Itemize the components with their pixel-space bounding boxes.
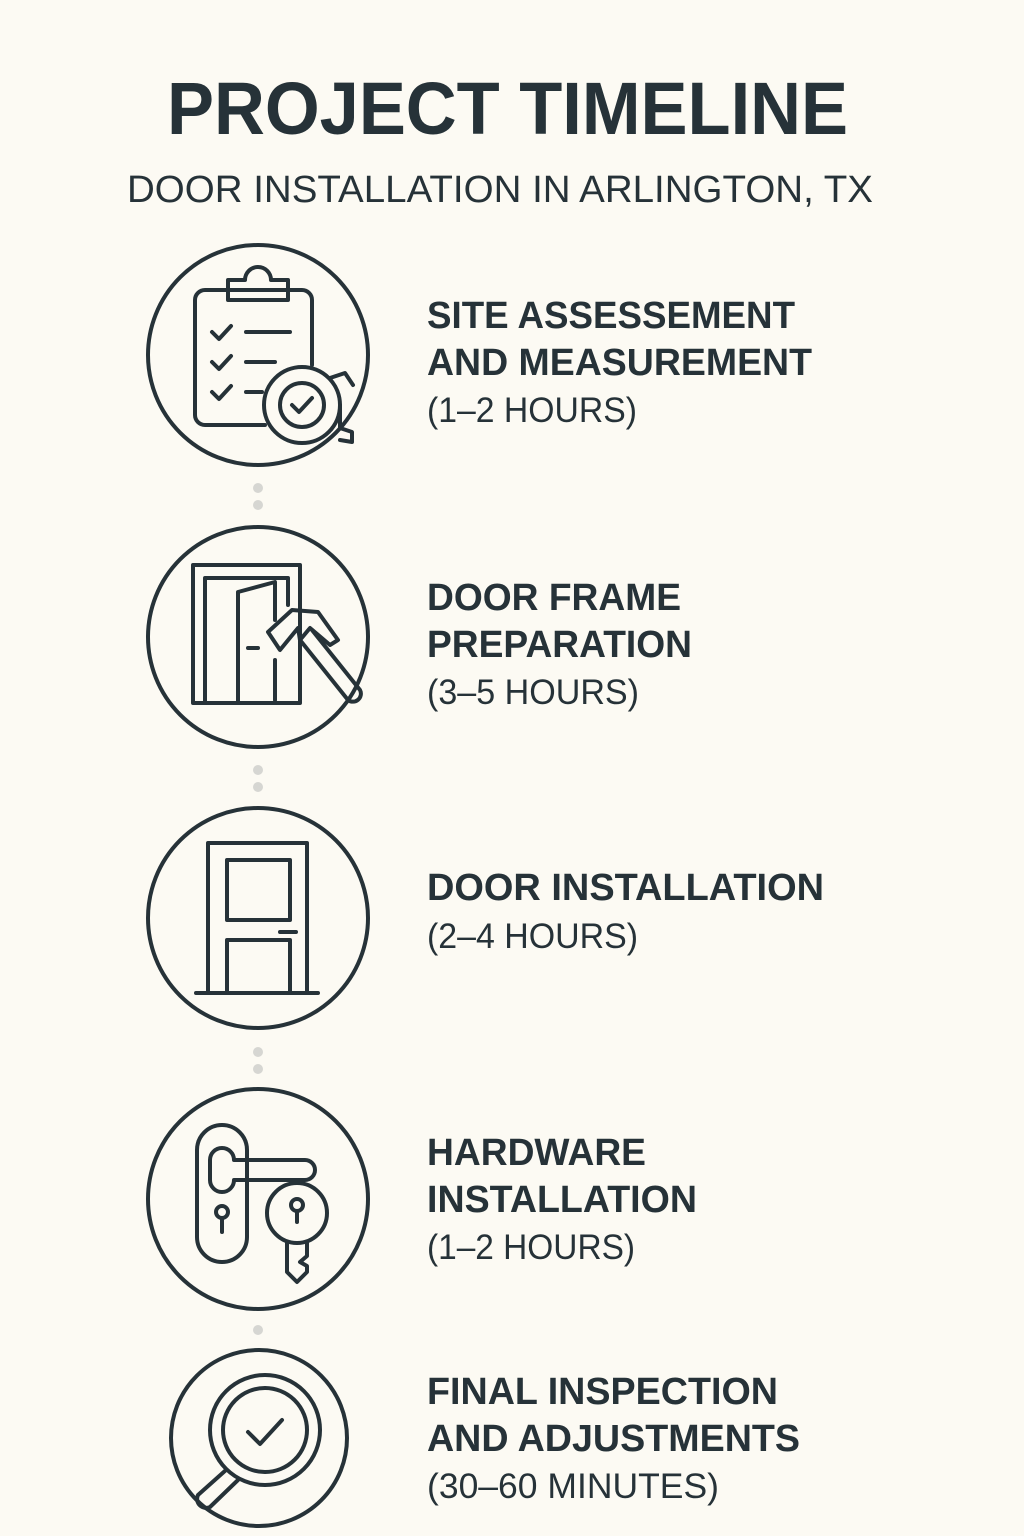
step 4 text: (1–2 HOURS) xyxy=(427,1228,635,1267)
subtitle: DOOR INSTALLATION IN ARLINGTON, TX xyxy=(127,169,873,211)
icon: door xyxy=(148,808,368,1028)
icon: clipboard and tape measure xyxy=(148,245,368,465)
icon: magnifier with check xyxy=(171,1350,347,1526)
step 1 text xyxy=(427,295,812,430)
step 1 text: AND MEASUREMENT xyxy=(427,342,812,384)
step 5 text: (30–60 MINUTES) xyxy=(427,1467,719,1506)
connector dots xyxy=(253,483,263,1335)
step 3 text: DOOR INSTALLATION xyxy=(427,867,824,909)
step 4 text xyxy=(427,1132,697,1267)
step 3 text xyxy=(427,867,824,956)
step 4 text: INSTALLATION xyxy=(427,1179,697,1221)
step 2 text: PREPARATION xyxy=(427,624,692,666)
step 2 text xyxy=(427,577,692,712)
step 5 text: AND ADJUSTMENTS xyxy=(427,1418,800,1460)
step 5 text: FINAL INSPECTION xyxy=(427,1371,778,1413)
title: PROJECT TIMELINE xyxy=(167,67,848,150)
step 2 text: (3–5 HOURS) xyxy=(427,673,639,712)
icon: door frame and hammer xyxy=(148,527,368,747)
step 4 text: HARDWARE xyxy=(427,1132,646,1174)
step 5 text xyxy=(427,1371,800,1506)
step 1 text: (1–2 HOURS) xyxy=(427,391,637,430)
step 1 text: SITE ASSESSEMENT xyxy=(427,295,795,337)
step 3 text: (2–4 HOURS) xyxy=(427,917,638,956)
icon: handle and key xyxy=(148,1089,368,1309)
step 2 text: DOOR FRAME xyxy=(427,577,681,619)
